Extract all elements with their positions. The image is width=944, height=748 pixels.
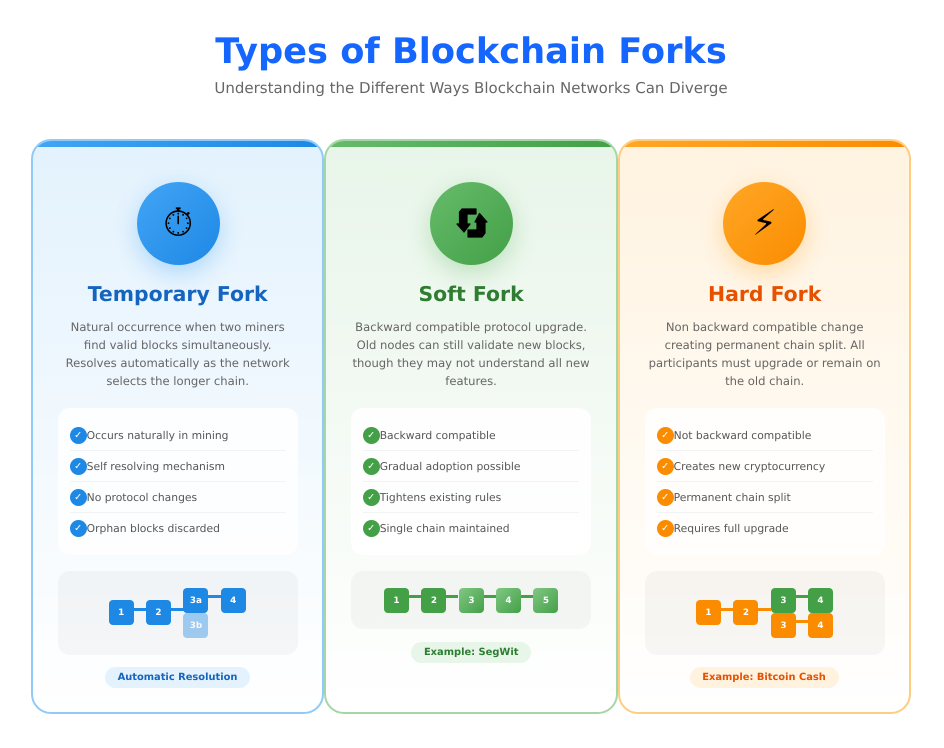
feature list	[645, 408, 885, 555]
chain diagram: permanent split: 3	[780, 596, 787, 606]
list item: Creates new cryptocurrency	[674, 460, 825, 473]
list item: Single chain maintained	[380, 522, 510, 535]
list item: Self resolving mechanism	[87, 460, 225, 473]
chain diagram: orphan branch: 3b	[190, 621, 202, 631]
heading: Hard Fork	[708, 282, 821, 306]
list item	[70, 520, 220, 537]
list item: No protocol changes	[87, 491, 197, 504]
chain diagram: single chain: 5	[543, 596, 549, 606]
list item: ✓	[661, 523, 669, 534]
list item	[363, 520, 510, 537]
icon: stopwatch: ⏱	[163, 201, 193, 246]
chain diagram: orphan branch	[58, 571, 298, 655]
description: though they may not understand all new	[352, 356, 590, 370]
list item: Requires full upgrade	[674, 522, 789, 535]
list item	[657, 520, 789, 537]
top accent bar	[33, 141, 322, 147]
feature list	[351, 408, 591, 555]
chain diagram: orphan branch: 2	[155, 608, 162, 618]
chain diagram: single chain: 2	[431, 596, 437, 606]
chain diagram: permanent split: 4	[817, 621, 824, 631]
description: participants must upgrade or remain on	[649, 356, 881, 370]
feature list	[58, 408, 298, 555]
description	[352, 320, 590, 388]
list item: ✓	[74, 461, 82, 472]
chain diagram: orphan branch: 4	[230, 596, 236, 606]
description: selects the longer chain.	[106, 374, 249, 388]
list item	[657, 420, 873, 451]
panel: soft fork	[324, 139, 618, 714]
list item: Tightens existing rules	[380, 491, 501, 504]
label pill	[411, 642, 531, 663]
list item: ✓	[661, 461, 669, 472]
list item: ✓	[74, 430, 82, 441]
chain diagram: orphan branch: 3a	[190, 596, 202, 606]
list item	[657, 451, 873, 482]
description: find valid blocks simultaneously.	[84, 338, 271, 352]
label pill: Example: SegWit	[424, 647, 518, 658]
list item	[70, 482, 286, 513]
list item	[363, 451, 579, 482]
panel: temporary fork	[31, 139, 324, 714]
list item	[70, 451, 286, 482]
list item	[363, 420, 579, 451]
title: Types of Blockchain Forks	[215, 31, 727, 72]
icon: stopwatch	[137, 182, 220, 265]
description: Non backward compatible change	[666, 320, 863, 334]
list item: ✓	[74, 492, 82, 503]
subtitle: Understanding the Different Ways Blockchain Networks Can Diverge	[214, 79, 728, 97]
heading: Soft Fork	[418, 282, 524, 306]
label pill	[690, 667, 838, 688]
chain diagram: permanent split: 4	[817, 596, 824, 606]
list item: ✓	[74, 523, 82, 534]
chain diagram: permanent split: 1	[705, 608, 712, 618]
list item: Backward compatible	[380, 429, 496, 442]
chain diagram: single chain: 3	[468, 596, 475, 606]
label pill: Automatic Resolution	[118, 672, 237, 683]
list item	[657, 482, 873, 513]
chain diagram: single chain: 1	[393, 596, 400, 606]
panel: hard fork	[618, 139, 911, 714]
description: Resolves automatically as the network	[66, 356, 290, 370]
icon: arrows cycle	[430, 182, 513, 265]
top accent bar	[620, 141, 909, 147]
label pill: Example: Bitcoin Cash	[702, 672, 826, 683]
description: Old nodes can still validate new blocks,	[357, 338, 585, 352]
description: Natural occurrence when two miners	[71, 320, 285, 334]
list item: ✓	[661, 430, 669, 441]
description: features.	[445, 374, 497, 388]
chain diagram: orphan branch: 1	[118, 608, 124, 618]
description	[66, 320, 290, 388]
list item: Orphan blocks discarded	[87, 522, 220, 535]
chain diagram: permanent split: 2	[743, 608, 749, 618]
chain diagram: single chain	[351, 571, 591, 629]
top accent bar	[326, 141, 616, 147]
icon: lightning bolt: ⚡	[752, 203, 777, 244]
description	[649, 320, 881, 388]
list item: Occurs naturally in mining	[87, 429, 228, 442]
list item: Not backward compatible	[674, 429, 811, 442]
label pill	[105, 667, 250, 688]
heading: Temporary Fork	[88, 282, 268, 306]
list item: ✓	[367, 523, 375, 534]
icon: lightning bolt	[723, 182, 806, 265]
description: creating permanent chain split. All	[665, 338, 865, 352]
chain diagram: permanent split	[645, 571, 885, 655]
list item: ✓	[367, 430, 375, 441]
list item: ✓	[661, 492, 669, 503]
list item: Gradual adoption possible	[380, 460, 520, 473]
list item: ✓	[367, 461, 375, 472]
list item: ✓	[367, 492, 375, 503]
list item: Permanent chain split	[674, 491, 791, 504]
list item	[70, 420, 286, 451]
chain diagram: permanent split: 3	[780, 621, 787, 631]
description: the old chain.	[725, 374, 804, 388]
chain diagram: single chain: 4	[505, 596, 512, 606]
description: Backward compatible protocol upgrade.	[355, 320, 587, 334]
list item	[363, 482, 579, 513]
